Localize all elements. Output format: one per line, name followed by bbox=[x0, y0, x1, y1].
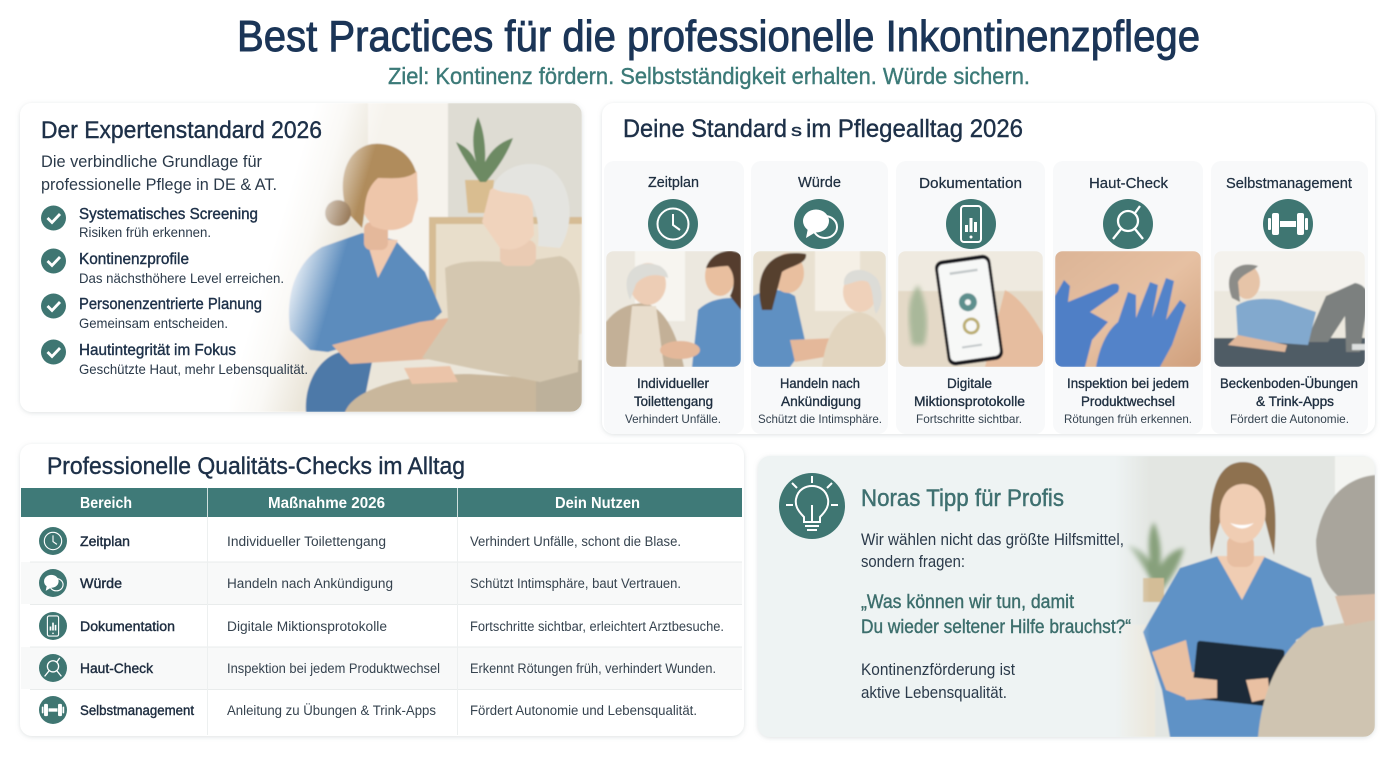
row: Selbstmanagement: Anleitung zu Übungen & Trink-Apps bbox=[227, 703, 436, 718]
photo: pelvic floor exercise bbox=[1214, 251, 1368, 367]
photo: senior with nurse bbox=[606, 251, 741, 367]
heading: Noras Tipp für Profis bbox=[861, 485, 1064, 512]
caption: Inspektion bei jedem bbox=[1067, 376, 1189, 391]
quote: Du wieder seltener Hilfe brauchst?“ bbox=[861, 617, 1131, 638]
heading: Deine Standard bbox=[623, 115, 787, 143]
caption: Produktwechsel bbox=[1081, 394, 1175, 409]
icon: light bulb bbox=[779, 473, 845, 539]
checklist bbox=[41, 206, 308, 377]
row: Haut-Check: Haut-Check bbox=[80, 661, 153, 676]
photo: gloved hands on skin bbox=[1055, 251, 1201, 367]
subtitle: Ziel: Kontinenz fördern. Selbstständigkeit erhalten. Würde sichern. bbox=[388, 63, 1030, 89]
row: Dokumentation: Dokumentation bbox=[80, 619, 175, 634]
icon: skin check bbox=[1103, 199, 1153, 249]
caption: Beckenboden-Übungen bbox=[1220, 376, 1358, 391]
caption: Rötungen früh erkennen. bbox=[1064, 412, 1192, 426]
caption: Miktionsprotokolle bbox=[914, 394, 1025, 409]
row: Selbstmanagement: Selbstmanagement bbox=[80, 703, 194, 718]
caption: Individueller bbox=[637, 376, 709, 391]
row: Zeitplan: Individueller Toilettengang bbox=[227, 534, 386, 549]
row: Dokumentation bbox=[39, 612, 724, 640]
intro text: Wir wählen nicht das größte Hilfsmittel, bbox=[861, 531, 1124, 549]
photo: phone in hand bbox=[898, 251, 1046, 367]
check item: haut: Hautintegrität im Fokus bbox=[79, 342, 236, 359]
heading: im Pflegealltag 2026 bbox=[806, 115, 1023, 143]
card: Selbstmanagement bbox=[1214, 176, 1365, 423]
card: Dokumentation: Dokumentation bbox=[919, 175, 1022, 192]
row: Haut-Check: Inspektion bei jedem Produktwechsel bbox=[227, 661, 440, 676]
panel: Deine Standards im Pflegealltag bbox=[602, 103, 1375, 434]
row: Würde bbox=[39, 569, 681, 597]
row: Würde: Handeln nach Ankündigung bbox=[227, 576, 393, 591]
intro text bbox=[861, 531, 1124, 571]
card: Würde bbox=[753, 176, 886, 426]
card: Selbstmanagement: Selbstmanagement bbox=[1226, 175, 1353, 192]
row: Haut-Check bbox=[39, 654, 716, 682]
caption bbox=[625, 376, 721, 426]
icon: phone with chart bbox=[946, 199, 996, 249]
check item: haut bbox=[41, 340, 308, 377]
row: Würde: Schützt Intimsphäre, baut Vertrauen. bbox=[470, 576, 681, 591]
check item: screening bbox=[41, 206, 258, 240]
closing text: Kontinenzförderung ist bbox=[861, 661, 1015, 679]
check item: haut: Geschützte Haut, mehr Lebensqualität. bbox=[79, 361, 308, 377]
check item: kontinenzprofile: Kontinenzprofile bbox=[79, 251, 189, 268]
check item: planung: Personenzentrierte Planung bbox=[79, 296, 262, 313]
row: Dokumentation: Digitale Miktionsprotokolle bbox=[227, 619, 387, 634]
caption bbox=[1220, 376, 1358, 426]
caption: Handeln nach bbox=[780, 376, 860, 391]
photo: nurse and senior woman bbox=[254, 103, 582, 412]
heading: s bbox=[791, 121, 802, 140]
caption: Schützt die Intimsphäre. bbox=[758, 412, 882, 426]
photo: smiling nurse with clipboard bbox=[1126, 456, 1375, 737]
row: Dokumentation: Fortschritte sichtbar, erleichtert Arztbesuche. bbox=[470, 619, 724, 634]
row: Würde: Würde bbox=[80, 576, 122, 591]
check item: planung: Gemeinsam entscheiden. bbox=[79, 315, 228, 331]
intro text: Die verbindliche Grundlage für bbox=[41, 152, 262, 171]
quote bbox=[861, 592, 1131, 638]
card: Haut-Check: Haut-Check bbox=[1089, 175, 1168, 192]
row: Selbstmanagement bbox=[39, 696, 697, 724]
caption: Fördert die Autonomie. bbox=[1230, 412, 1349, 426]
card: Würde: Würde bbox=[798, 174, 841, 191]
check item: kontinenzprofile: Das nächsthöhere Level erreichen. bbox=[79, 270, 284, 286]
intro text bbox=[41, 152, 277, 194]
panel: Noras Tipp bbox=[758, 456, 1375, 737]
table header: Maßnahme 2026 bbox=[268, 495, 385, 512]
heading: Professionelle Qualitäts-Checks im Alltag bbox=[47, 453, 465, 480]
caption: & Trink-Apps bbox=[1256, 394, 1334, 409]
card: Haut-Check bbox=[1055, 176, 1201, 426]
table header: Bereich bbox=[80, 495, 132, 512]
panel: Der Expertenstandard 2026 bbox=[20, 103, 582, 412]
closing text: aktive Lebensqualität. bbox=[861, 684, 1007, 702]
icon: speech bubbles bbox=[794, 199, 844, 249]
table header bbox=[21, 488, 742, 517]
heading: Der Expertenstandard 2026 bbox=[41, 117, 322, 144]
check item: kontinenzprofile bbox=[41, 248, 284, 286]
row: Selbstmanagement: Fördert Autonomie und Lebensqualität. bbox=[470, 703, 697, 718]
icon: dumbbell bbox=[1263, 199, 1313, 249]
intro text: sondern fragen: bbox=[861, 553, 965, 571]
photo: nurse announcing care bbox=[753, 251, 886, 367]
caption: Digitale bbox=[947, 376, 992, 391]
row: Zeitplan: Verhindert Unfälle, schont die Blase. bbox=[470, 534, 681, 549]
card: Zeitplan: Zeitplan bbox=[648, 174, 699, 191]
check item: screening: Risiken früh erkennen. bbox=[79, 224, 211, 240]
caption: Toilettengang bbox=[634, 394, 713, 409]
caption bbox=[758, 376, 882, 426]
panel: Qualitäts-Checks table bbox=[20, 444, 744, 736]
icon: clock bbox=[648, 199, 698, 249]
row: Zeitplan: Zeitplan bbox=[80, 534, 130, 549]
title: Best Practices für die professionelle Inkontinenzpflege bbox=[237, 12, 1200, 61]
card: Dokumentation bbox=[898, 176, 1043, 423]
row: Haut-Check: Erkennt Rötungen früh, verhindert Wunden. bbox=[470, 661, 716, 676]
check item: screening: Systematisches Screening bbox=[79, 206, 258, 223]
heading bbox=[623, 115, 1023, 143]
table header: Dein Nutzen bbox=[555, 495, 640, 512]
intro text: professionelle Pflege in DE & AT. bbox=[41, 175, 277, 194]
quote: „Was können wir tun, damit bbox=[861, 592, 1075, 613]
caption: Ankündigung bbox=[781, 394, 861, 409]
caption: Fortschritte sichtbar. bbox=[916, 412, 1022, 426]
caption: Verhindert Unfälle. bbox=[625, 412, 721, 426]
caption bbox=[914, 376, 1025, 426]
caption bbox=[1064, 376, 1192, 426]
row: Zeitplan bbox=[39, 527, 681, 555]
check item: planung bbox=[41, 294, 262, 331]
closing text bbox=[861, 661, 1015, 702]
card: Zeitplan bbox=[606, 176, 741, 423]
